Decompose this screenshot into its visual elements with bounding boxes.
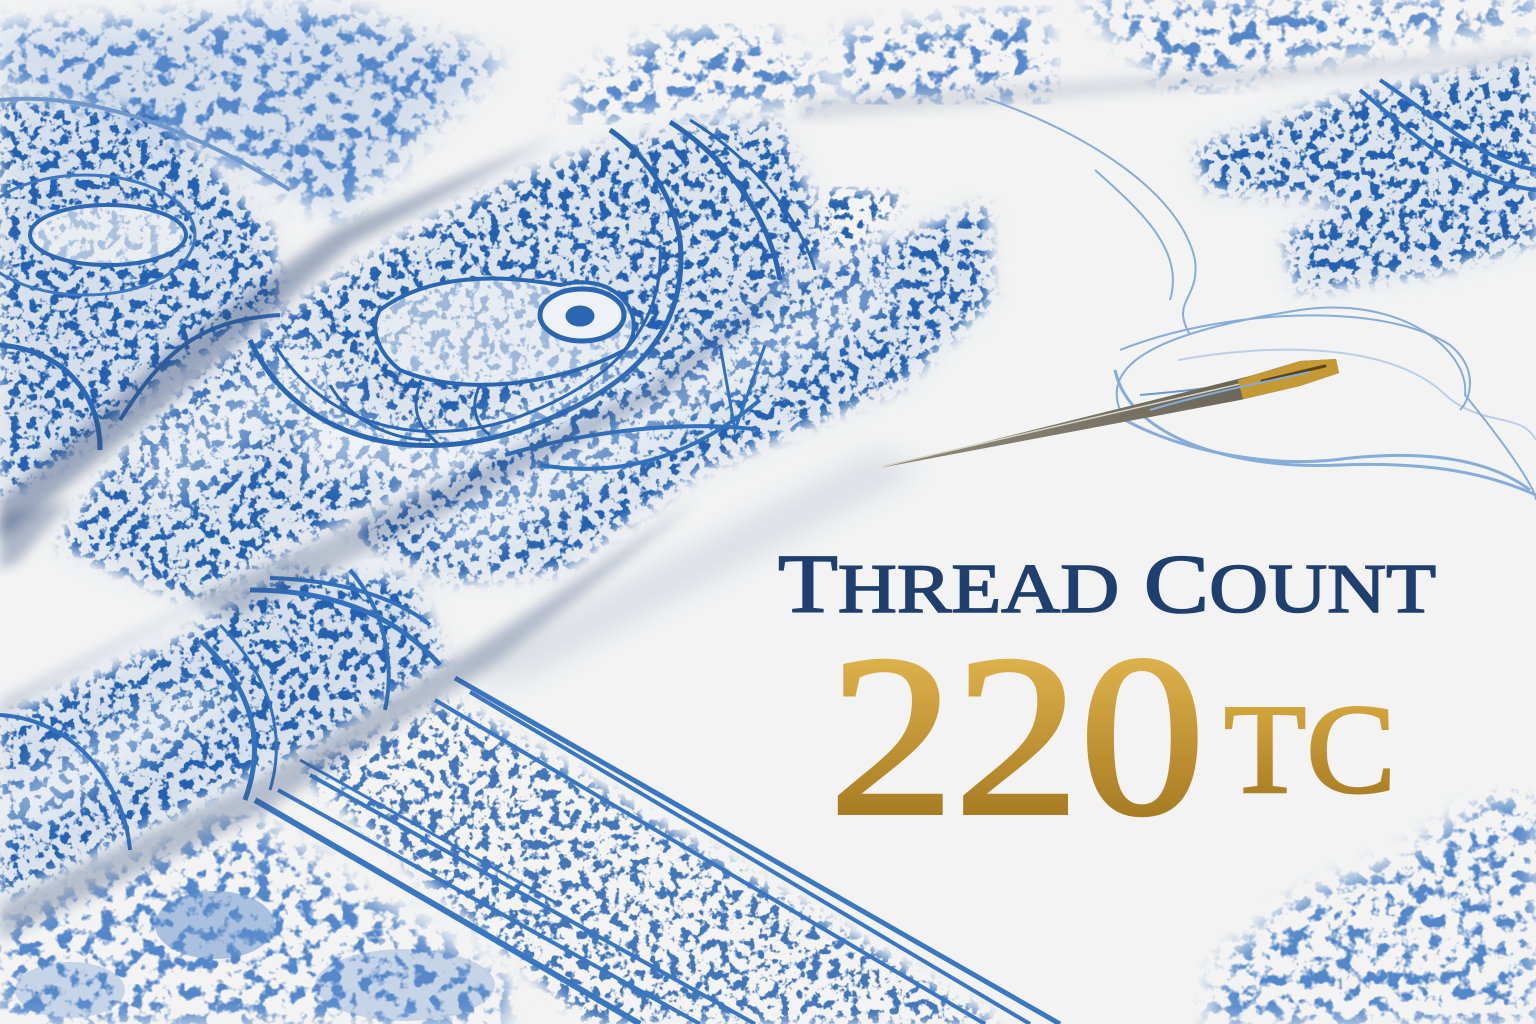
roller ridge highlight bbox=[420, 270, 900, 560]
panel: bottom-right floral motif bbox=[1210, 800, 1536, 1024]
roller stripes bbox=[0, 345, 765, 850]
panel: top-right floral motif bbox=[1195, 60, 1536, 290]
loose blue thread bbox=[985, 98, 1536, 500]
value: 220 TC: 220 bbox=[829, 608, 1205, 863]
panel: central paisley fold bbox=[60, 120, 905, 600]
panel: bottom-left floral print bbox=[0, 815, 510, 1024]
value: 220 TC: TC bbox=[1224, 678, 1396, 820]
panel: long roller fold bbox=[0, 205, 990, 900]
fold ridge highlight bbox=[130, 340, 360, 520]
icon: sewing needle bbox=[880, 359, 1339, 468]
panel: bottom border stripes bbox=[255, 678, 1060, 1024]
value: 220 TC bbox=[829, 608, 1396, 863]
panel: top background cloth, soft focus bbox=[0, 0, 1536, 215]
icon: paisley motif bbox=[250, 120, 815, 446]
panel: left drape pattern bbox=[0, 99, 290, 500]
title: thread count: THREAD COUNT bbox=[778, 538, 1436, 631]
